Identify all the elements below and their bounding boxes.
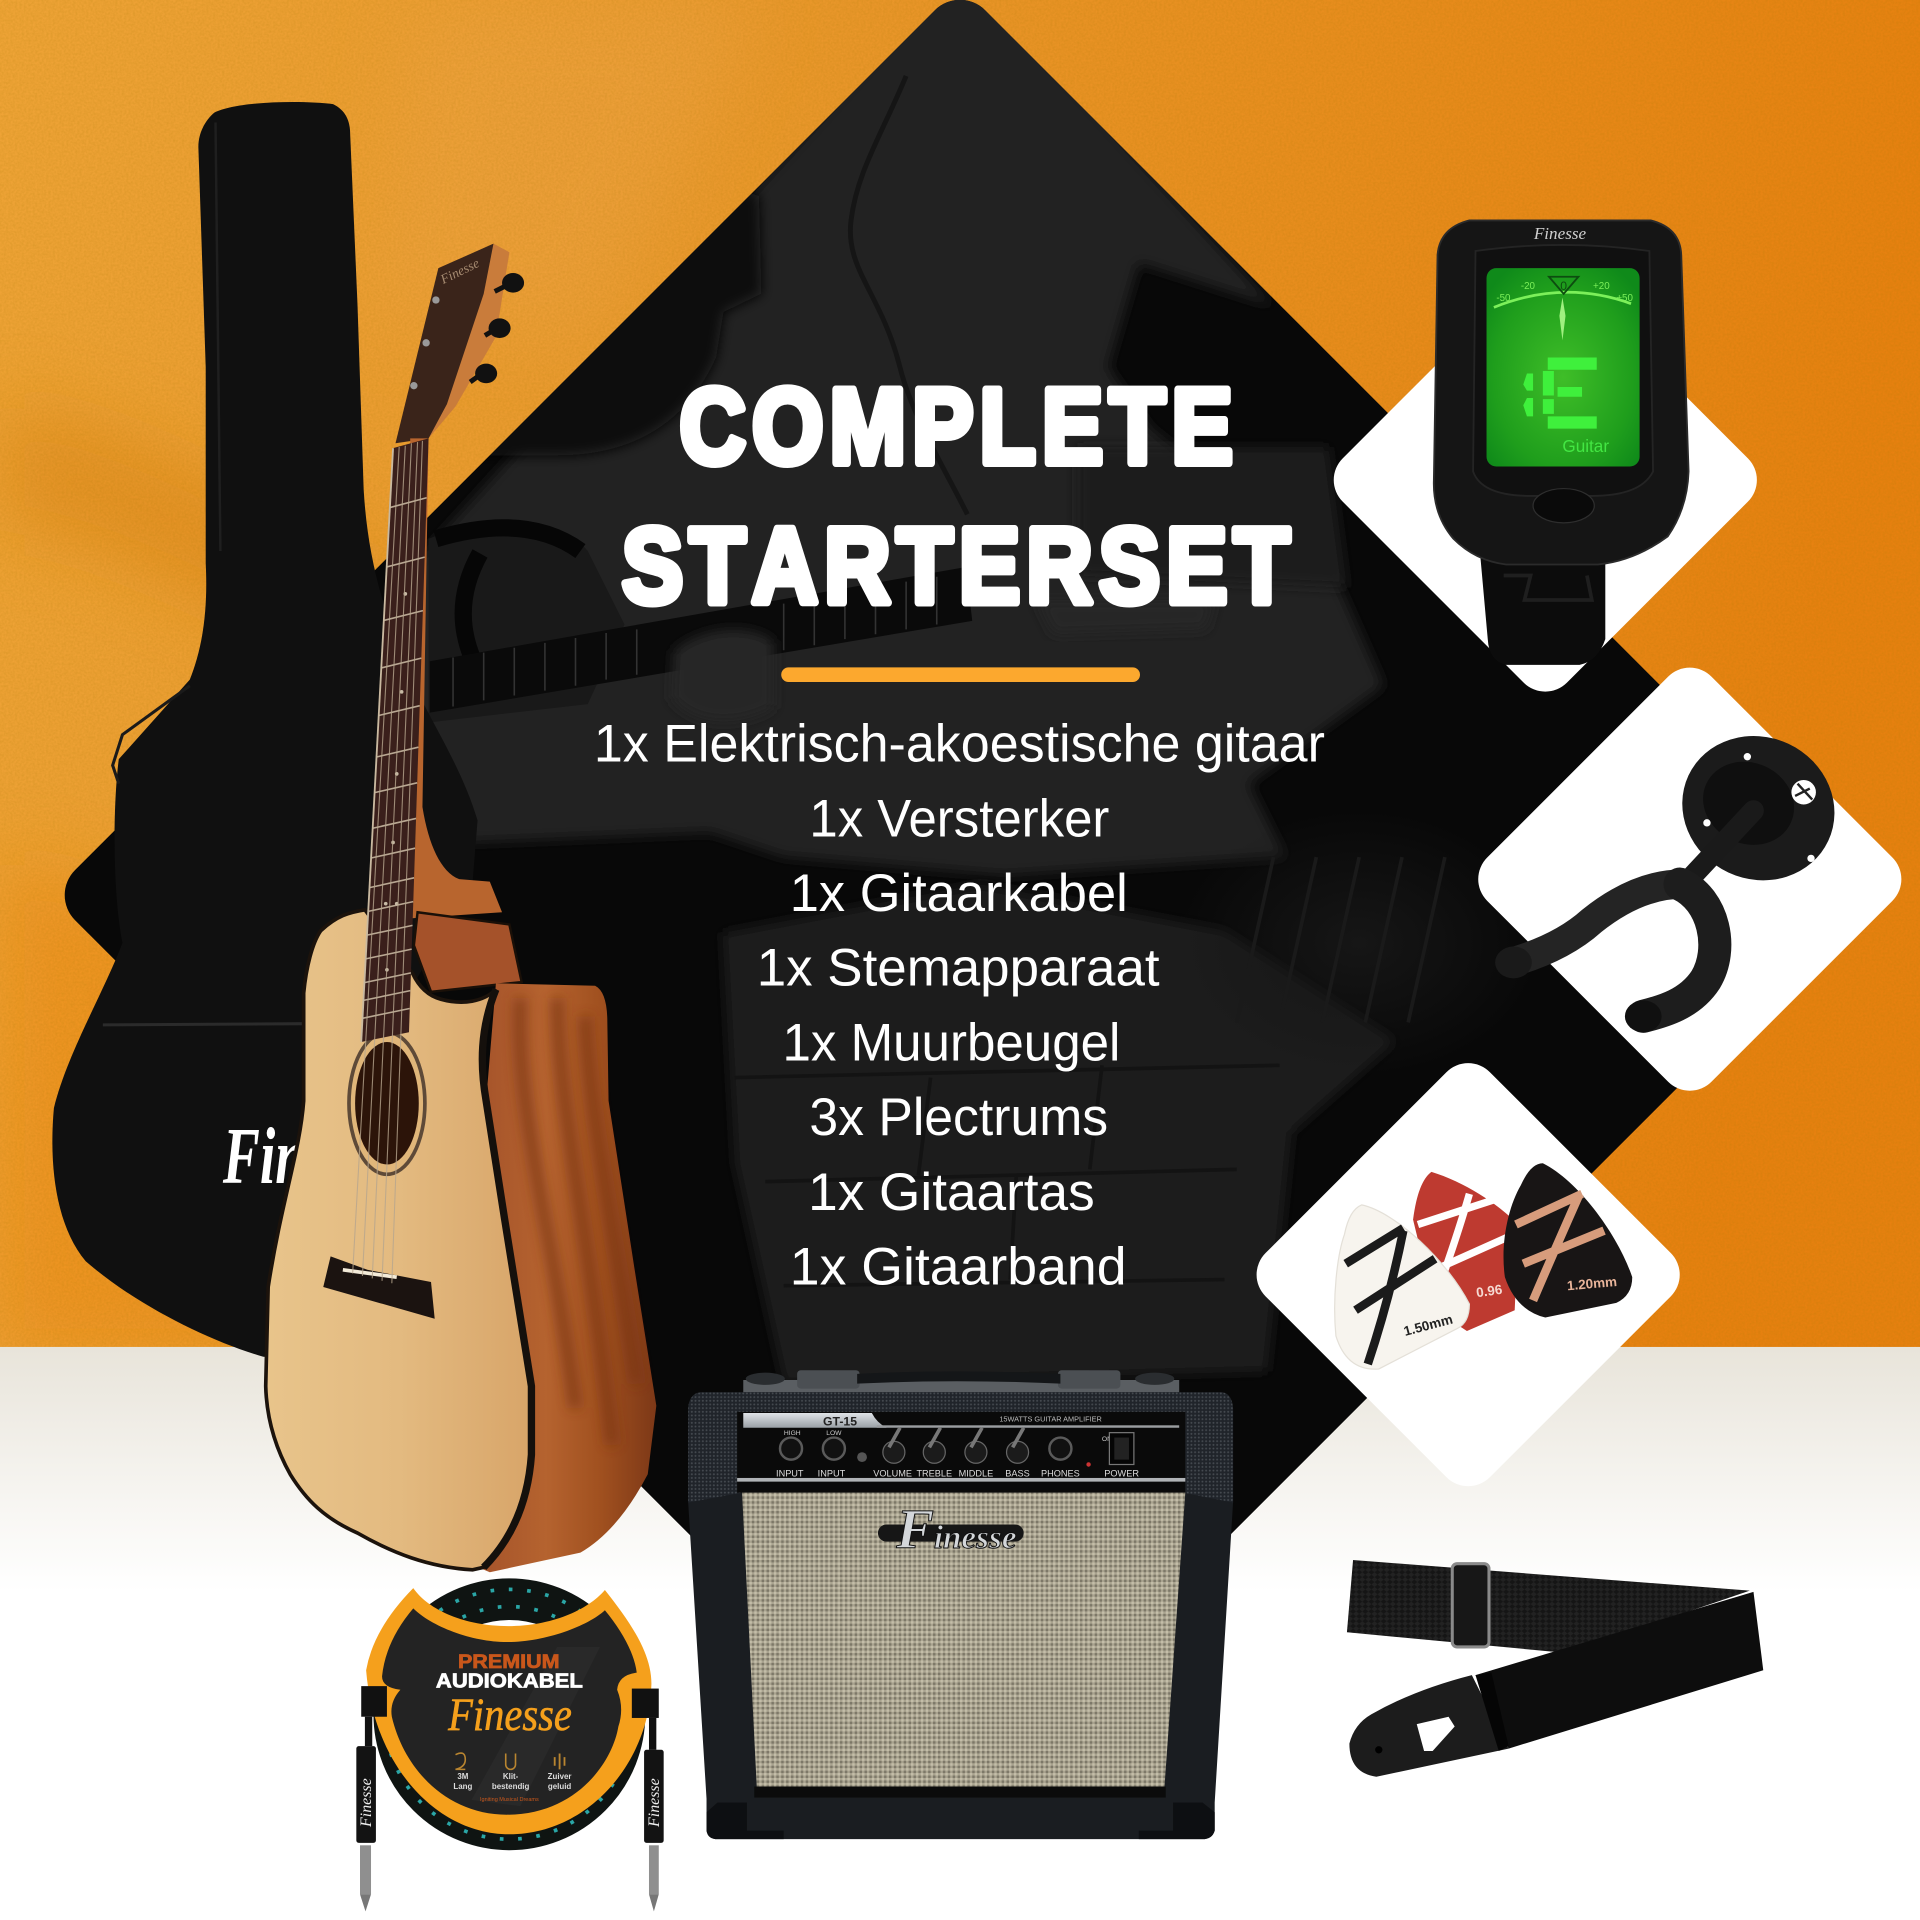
white pick: 1.50mm [1402, 1312, 1454, 1339]
black diamond panel with photo [64, 0, 1678, 1536]
fretboard [361, 438, 429, 1042]
amp control panel: TREBLE [916, 1469, 952, 1479]
amp control panel: BASS [1005, 1469, 1030, 1479]
photo: shirt and stone upper area [392, 0, 1384, 876]
tuner screen: +50 [1616, 293, 1633, 304]
acoustic guitar [266, 244, 656, 1572]
audio cable [356, 1588, 664, 1911]
photo: dark hair and collar [478, 171, 762, 456]
amp control panel: 15WATTS GUITAR AMPLIFIER [999, 1415, 1102, 1424]
packaging card: Igniting Musical Dreams [480, 1797, 539, 1803]
red pick [1413, 1172, 1518, 1331]
amp control panel: INPUT [818, 1469, 846, 1479]
lower prong [1625, 884, 1715, 1032]
strings [353, 441, 422, 1283]
white diamond: tuner [1321, 256, 1770, 704]
strap upper band [1347, 1560, 1750, 1653]
packaging card: 3M [457, 1772, 469, 1781]
packaging card [366, 1588, 651, 1834]
contents list: 1x Gitaarband [790, 1237, 1127, 1296]
white pick [1335, 1205, 1469, 1369]
amp control panel: POWER [1104, 1469, 1139, 1479]
guitar side [473, 983, 656, 1572]
headstock and neck back: Finesse [437, 255, 482, 287]
contents list [594, 715, 1325, 1296]
amp control panel: PHONES [1041, 1469, 1080, 1479]
photo: stone wall [722, 884, 1396, 1384]
contents list: 1x Elektrisch-akoestische gitaar [594, 715, 1325, 774]
bag logo: Fin [222, 1112, 306, 1201]
title [622, 367, 1296, 626]
contents list: 1x Gitaarkabel [790, 864, 1128, 923]
background: floor [0, 1347, 1920, 1592]
contents list: 1x Muurbeugel [782, 1013, 1120, 1072]
hook plate [1658, 711, 1858, 905]
contents list: 3x Plectrums [809, 1088, 1108, 1147]
amp control panel: LOW [826, 1430, 842, 1437]
amplifier [688, 1370, 1233, 1839]
amp control panel: GT-15 [823, 1414, 857, 1428]
guitar picks [1335, 1163, 1632, 1369]
white diamond: picks [1244, 1050, 1692, 1499]
gig bag [52, 102, 478, 1359]
right plug [632, 1689, 664, 1911]
tuner clip [1480, 557, 1605, 665]
amp control panel [737, 1412, 1185, 1493]
left plug [356, 1686, 387, 1911]
amp grille [742, 1493, 1185, 1787]
packaging card: Klit- [503, 1772, 519, 1781]
left plug: Finesse [358, 1778, 375, 1828]
photo: electric guitar body [429, 524, 624, 722]
photo: striped surface [1252, 856, 1446, 1023]
right plug: Finesse [646, 1778, 663, 1828]
tuner: Finesse [1533, 224, 1587, 243]
packaging card: Zuiver [548, 1772, 572, 1781]
amp control panel: INPUT [776, 1469, 804, 1479]
tuner screen: -20 [1521, 281, 1536, 292]
tuner [1434, 220, 1689, 665]
amp cabinet [688, 1392, 1233, 1839]
amp handle [743, 1370, 1179, 1395]
white diamond: wall hook [1466, 655, 1914, 1103]
amp logo: Finesse [895, 1499, 1017, 1561]
tuner screen: 0 [1560, 279, 1567, 293]
red pick: 0.96 [1475, 1282, 1503, 1300]
amp control panel: HIGH [784, 1430, 801, 1437]
packaging card: Finesse [447, 1690, 572, 1741]
packaging card: bestendig [492, 1782, 529, 1791]
contents list: 1x Versterker [809, 789, 1109, 848]
amp control panel: ON [1102, 1436, 1112, 1443]
photo: guitar neck [430, 568, 972, 712]
soundhole [349, 1032, 425, 1174]
wall hook [1495, 711, 1858, 1032]
background: orange wall [0, 0, 1920, 1353]
packaging card: AUDIOKABEL [436, 1670, 583, 1692]
contents list: 1x Stemapparaat [757, 939, 1160, 998]
upper prong [1495, 884, 1682, 978]
strap buckle [1452, 1564, 1489, 1647]
strap lower band [1476, 1592, 1763, 1749]
orange divider [781, 667, 1140, 682]
hook arm [1685, 811, 1753, 884]
amp control panel: VOLUME [873, 1469, 912, 1479]
cutaway back piece [414, 912, 522, 992]
amp control panel: MIDDLE [959, 1469, 993, 1479]
cable coil [384, 1589, 634, 1839]
black pick: 1.20mm [1566, 1274, 1618, 1293]
guitar binding [482, 989, 531, 1567]
tuner screen [1487, 268, 1640, 467]
guitar strap [1347, 1560, 1763, 1777]
title: STARTERSET [622, 507, 1296, 626]
guitar top [266, 910, 531, 1570]
black pick [1503, 1163, 1632, 1318]
tuner screen: +20 [1593, 281, 1610, 292]
packaging card: Lang [453, 1782, 472, 1791]
tuner body [1434, 220, 1689, 564]
tuner screen: -50 [1496, 293, 1511, 304]
contents list: 1x Gitaartas [808, 1163, 1095, 1222]
bridge [323, 1256, 435, 1319]
tuner screen: Guitar [1562, 436, 1609, 456]
packaging card: geluid [548, 1782, 571, 1791]
headstock and neck back [396, 244, 524, 918]
packaging card: PREMIUM [458, 1651, 560, 1673]
title: COMPLETE [680, 367, 1239, 486]
strap leather end [1349, 1675, 1509, 1777]
